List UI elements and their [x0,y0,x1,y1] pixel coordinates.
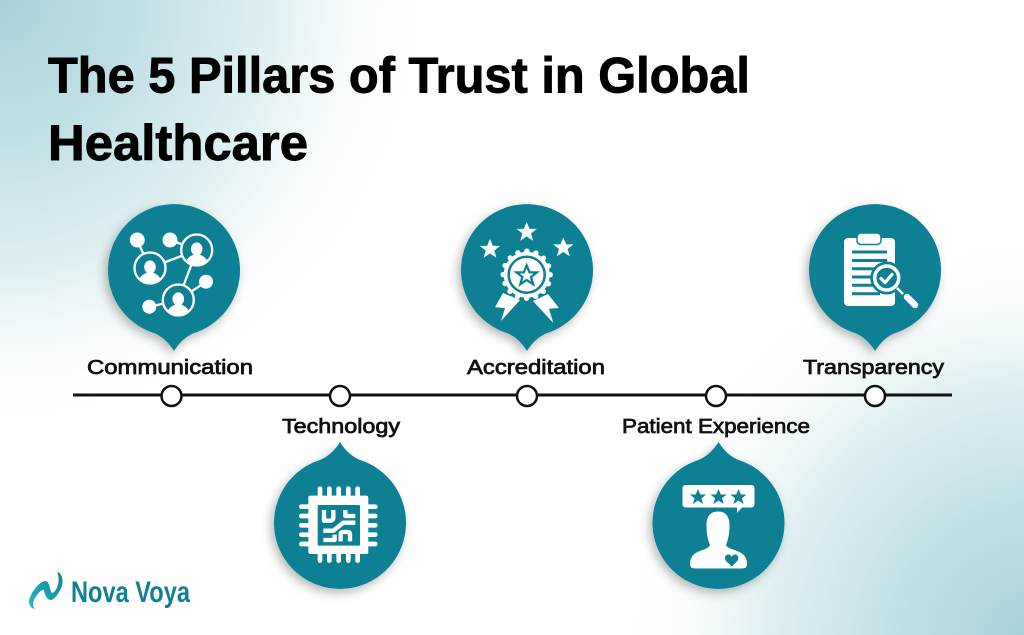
pin: Accreditation [461,204,593,351]
pillar: Communication [87,204,253,379]
logo wordmark: Nova Voya [71,576,190,609]
icon: patient with rating [682,485,754,568]
label: Communication: Communication [87,356,253,379]
pin: Technology [274,442,406,589]
icon: microchip [301,489,375,561]
label: Technology: Technology [282,415,401,438]
pin: Transparency [809,204,941,351]
pillar: Accreditation [461,204,605,379]
label: Accreditation: Accreditation [467,356,605,379]
pin: Patient Experience [652,442,785,589]
icon: award badge with stars [480,222,574,323]
pillar: Transparency [803,204,945,379]
pillar: Technology [274,415,406,589]
pin: Communication [108,204,240,351]
icon: clipboard with magnifier [844,233,915,306]
logo mark [29,572,63,609]
logo: Nova Voya [29,572,190,609]
title: The 5 Pillars of Trust in Global [48,48,750,104]
label: Patient Experience: Patient Experience [622,415,810,438]
timeline [73,386,952,406]
pillar: Patient Experience [622,415,810,589]
label: Transparency: Transparency [803,356,945,379]
title: Healthcare [48,115,308,171]
icon: connected people network [130,232,213,316]
title [48,48,750,171]
